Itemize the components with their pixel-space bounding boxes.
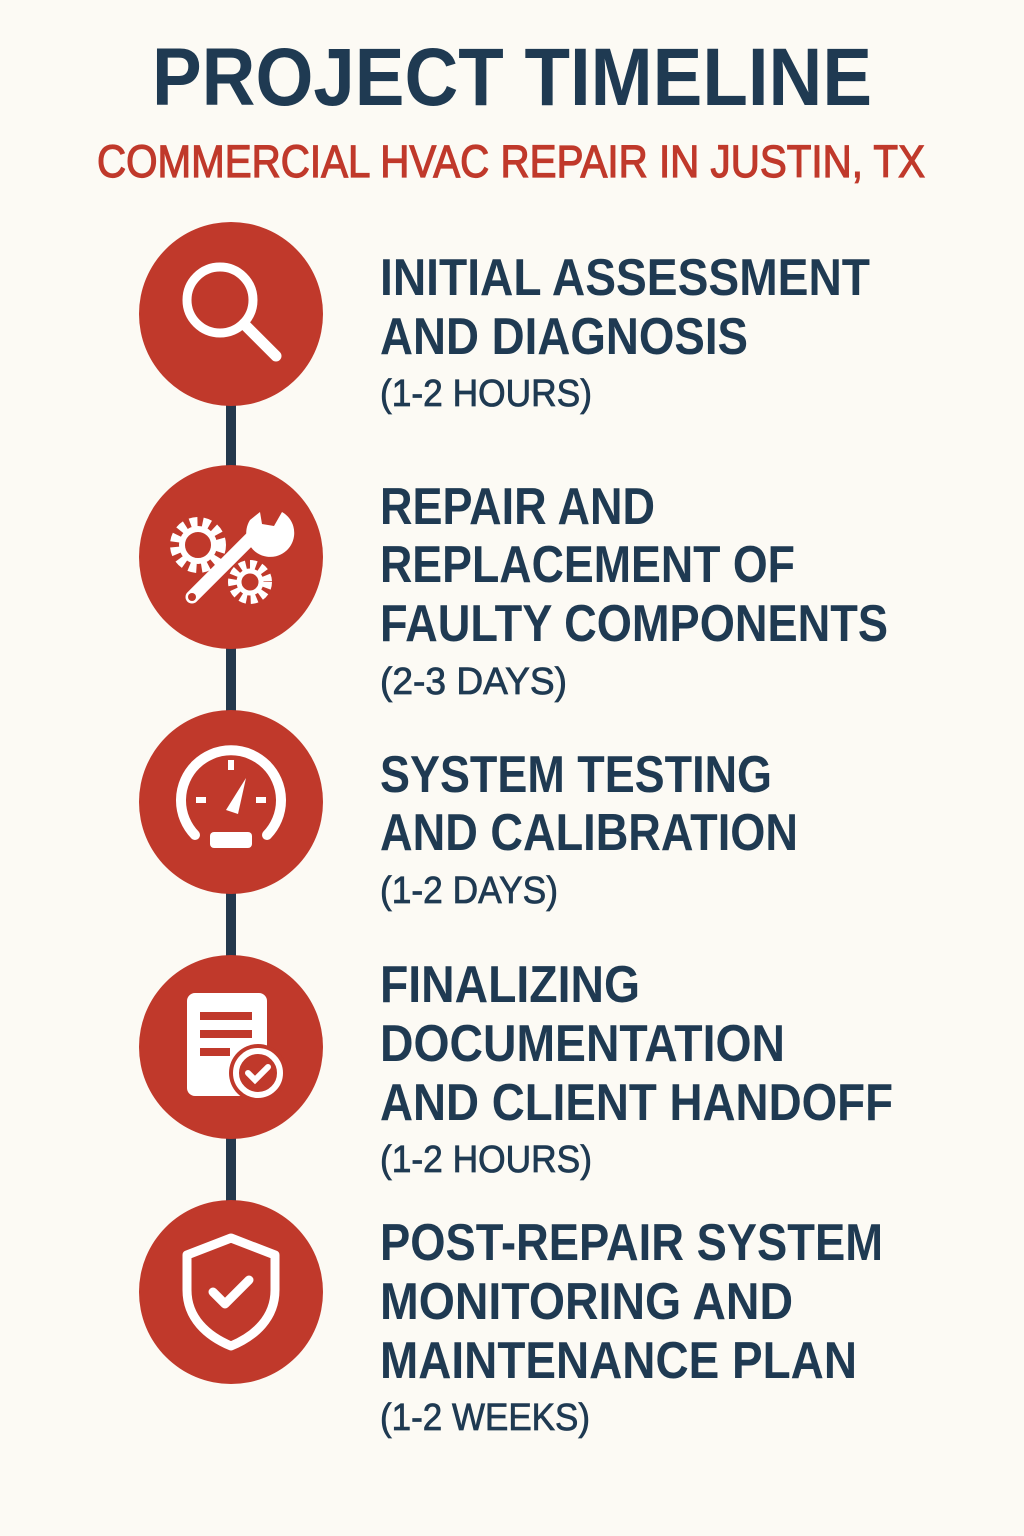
text: step 5: (1-2 WEEKS): [380, 1397, 590, 1439]
text: step 1: (1-2 HOURS): [380, 373, 592, 415]
text: step 2: (2-3 DAYS): [380, 661, 567, 703]
text: step 1: [380, 249, 870, 415]
icon: magnifier: [139, 222, 323, 406]
text: step 4: [380, 956, 893, 1181]
text: step 3: SYSTEM TESTING: [380, 746, 772, 804]
text: step 5: [380, 1214, 883, 1439]
step 4: documentation: [139, 955, 893, 1181]
text: step 1: AND DIAGNOSIS: [380, 308, 748, 366]
text: step 3: AND CALIBRATION: [380, 804, 798, 862]
text: step 2: REPAIR AND: [380, 478, 655, 536]
text: step 5: MONITORING AND: [380, 1273, 793, 1331]
icon: document with check: [139, 955, 323, 1139]
step 3: testing: [139, 710, 798, 912]
step 1: initial assessment: [139, 222, 870, 415]
text: step 3: [380, 746, 798, 912]
text: step 4: (1-2 HOURS): [380, 1139, 592, 1181]
step 5: monitoring: [139, 1200, 883, 1439]
text: step 4: FINALIZING: [380, 956, 640, 1014]
timeline connector line: [226, 314, 236, 1292]
text: step 2: [380, 478, 888, 703]
step 2: repair: [139, 465, 888, 703]
icon: gauge: [139, 710, 323, 894]
text: step 4: DOCUMENTATION: [380, 1015, 785, 1073]
text: step 3: (1-2 DAYS): [380, 870, 558, 912]
text: step 1: INITIAL ASSESSMENT: [380, 249, 870, 307]
icon: gears and wrench: [139, 465, 323, 649]
text: step 4: AND CLIENT HANDOFF: [380, 1074, 893, 1132]
text: step 2: FAULTY COMPONENTS: [380, 595, 888, 653]
text: step 2: REPLACEMENT OF: [380, 536, 795, 594]
title: PROJECT TIMELINE: [152, 32, 872, 123]
icon: shield with check: [139, 1200, 323, 1384]
text: step 5: POST-REPAIR SYSTEM: [380, 1214, 883, 1272]
text: step 5: MAINTENANCE PLAN: [380, 1332, 857, 1390]
subtitle: COMMERCIAL HVAC REPAIR IN JUSTIN, TX: [97, 136, 925, 187]
